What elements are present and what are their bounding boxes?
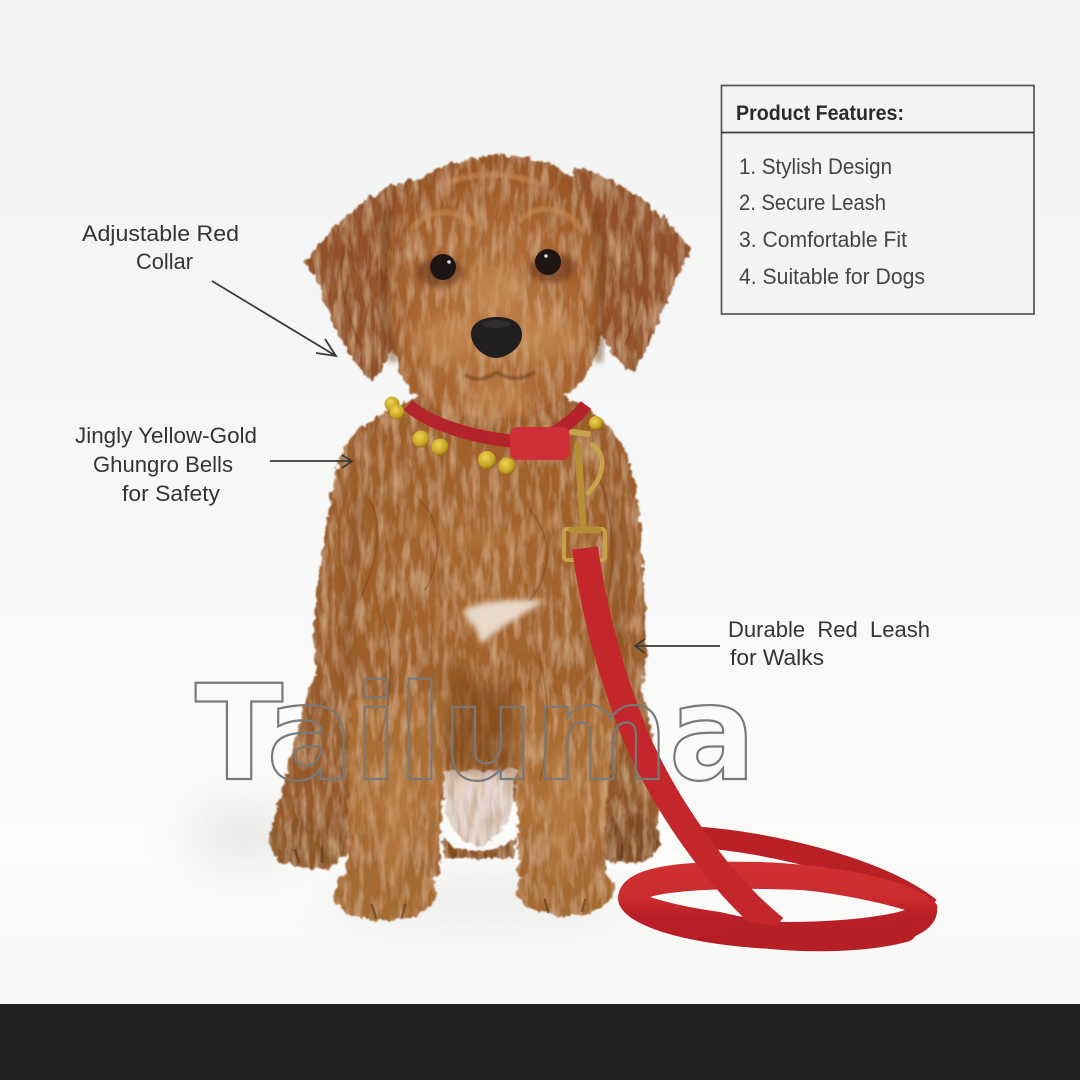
arrow to collar xyxy=(212,281,336,356)
muzzle glow xyxy=(413,268,580,412)
feature list: 1. Stylish Design xyxy=(739,154,892,179)
nose xyxy=(471,317,522,358)
gold leash clip xyxy=(564,432,605,560)
leash back loop xyxy=(696,837,930,908)
callout: ghungro bells: Jingly Yellow-Gold xyxy=(75,423,257,448)
callout: adjustable red collar: Collar xyxy=(136,249,193,274)
leash lower band over strap xyxy=(735,930,905,939)
body fur shading xyxy=(348,500,620,870)
left ear xyxy=(305,180,415,380)
front legs xyxy=(334,690,615,921)
collar xyxy=(408,405,586,460)
panel: product features xyxy=(721,86,1034,314)
puppy xyxy=(269,156,690,921)
panel heading: Product Features: xyxy=(736,102,904,125)
feature list: 2. Secure Leash xyxy=(739,190,886,215)
fur strands xyxy=(341,235,644,780)
right ear xyxy=(572,168,690,372)
callout: durable red leash: Durable Red Leash xyxy=(728,617,930,642)
callout: ghungro bells: for Safety xyxy=(122,481,220,506)
gold bells xyxy=(384,396,603,474)
brow fur highlights xyxy=(412,175,582,230)
paw toes xyxy=(295,845,622,918)
right ear shading xyxy=(592,210,602,362)
leash main strap xyxy=(585,548,775,928)
puppy body xyxy=(269,395,660,921)
leash front loop xyxy=(618,862,937,950)
belly xyxy=(442,770,516,846)
feature list: 3. Comfortable Fit xyxy=(739,227,907,252)
left eye xyxy=(430,254,456,280)
mouth xyxy=(465,372,535,379)
callout: durable red leash: for Walks xyxy=(730,645,824,670)
torso xyxy=(314,395,646,800)
callout: adjustable red collar xyxy=(82,221,336,356)
callout: durable red leash xyxy=(635,617,930,670)
eye shading xyxy=(416,253,576,287)
white chest patch xyxy=(462,600,545,645)
shaded fur between legs xyxy=(445,650,516,770)
feature list: 4. Suitable for Dogs xyxy=(739,264,925,289)
watermark: Tailuma: Tailuma xyxy=(195,657,756,811)
arrow to leash xyxy=(635,639,720,653)
right eye xyxy=(535,249,561,275)
red leash xyxy=(585,548,937,950)
feature list xyxy=(739,154,925,289)
collar buckle xyxy=(510,427,570,460)
callout: ghungro bells xyxy=(75,423,352,506)
bottom dark bar xyxy=(0,1004,1080,1080)
skull and muzzle xyxy=(386,156,607,419)
arrow to bells xyxy=(270,455,352,468)
back legs and paws xyxy=(269,670,660,868)
belly shadow xyxy=(442,836,516,858)
callout: ghungro bells: Ghungro Bells xyxy=(93,452,233,477)
floor shadow xyxy=(190,807,630,916)
callout: adjustable red collar: Adjustable Red xyxy=(82,221,239,246)
head xyxy=(305,156,690,419)
ear inner shading xyxy=(383,210,394,362)
